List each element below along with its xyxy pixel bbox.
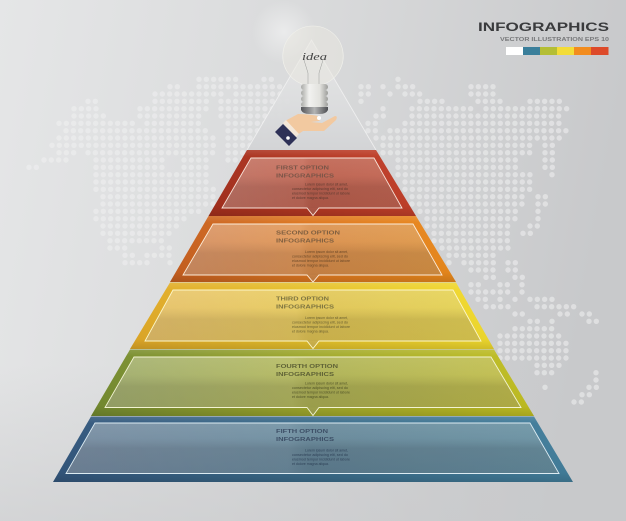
glass panel xyxy=(222,158,402,216)
subtitle: VECTOR ILLUSTRATION EPS 10 xyxy=(500,37,609,43)
text xyxy=(276,230,350,268)
icon: idea light bulb xyxy=(283,26,343,114)
bulb glass xyxy=(283,26,343,85)
text: SECOND OPTION xyxy=(276,230,340,236)
icon: hand holding bulb xyxy=(275,114,337,146)
text xyxy=(276,429,350,466)
text: consectetur adipiscing elit, sed do xyxy=(292,254,348,258)
text: Lorem ipsum dolor sit amet, xyxy=(305,382,348,386)
text: eiusmod tempor incididunt ut labore xyxy=(292,259,350,263)
text: et dolore magna aliqua. xyxy=(292,395,329,399)
dotted world map xyxy=(29,79,597,402)
text: consectetur adipiscing elit, sed do xyxy=(292,453,348,457)
filament xyxy=(304,60,323,85)
text: FIFTH OPTION xyxy=(276,429,328,435)
panel: third option xyxy=(130,282,494,349)
text: et dolore magna aliqua. xyxy=(292,196,329,200)
panel: second option xyxy=(170,216,456,282)
apex triangle xyxy=(247,40,376,150)
title: INFOGRAPHICS xyxy=(478,20,609,34)
text: eiusmod tempor incididunt ut labore xyxy=(292,192,350,196)
glass panel xyxy=(183,224,442,282)
text: et dolore magna aliqua. xyxy=(292,264,329,268)
text: consectetur adipiscing elit, sed do xyxy=(292,321,348,325)
glass panel xyxy=(66,423,559,474)
panel: fourth option xyxy=(91,350,534,416)
text: THIRD OPTION xyxy=(276,296,329,302)
text xyxy=(276,296,350,334)
text: et dolore magna aliqua. xyxy=(292,330,329,334)
text: Lorem ipsum dolor sit amet, xyxy=(305,182,348,186)
text: FIRST OPTION xyxy=(276,165,329,171)
panel: first option xyxy=(208,150,416,216)
colour legend xyxy=(506,47,608,55)
text: consectetur adipiscing elit, sed do xyxy=(292,386,348,390)
text: Lorem ipsum dolor sit amet, xyxy=(305,448,348,452)
text: INFOGRAPHICS xyxy=(276,437,334,443)
title block xyxy=(478,20,609,55)
text xyxy=(276,364,350,399)
text: Lorem ipsum dolor sit amet, xyxy=(305,316,348,320)
panel: fifth option xyxy=(53,416,573,482)
glass panel xyxy=(145,290,481,348)
text: FOURTH OPTION xyxy=(276,364,338,370)
word: idea: idea xyxy=(302,51,328,63)
text: INFOGRAPHICS xyxy=(276,304,334,310)
text xyxy=(276,165,350,200)
glass panel xyxy=(105,357,521,416)
text: et dolore magna aliqua. xyxy=(292,462,329,466)
text: eiusmod tempor incididunt ut labore xyxy=(292,391,350,395)
text: Lorem ipsum dolor sit amet, xyxy=(305,250,348,254)
text: consectetur adipiscing elit, sed do xyxy=(292,187,348,191)
text: eiusmod tempor incididunt ut labore xyxy=(292,325,350,329)
text: INFOGRAPHICS xyxy=(276,174,334,180)
text: INFOGRAPHICS xyxy=(276,372,334,378)
screw base xyxy=(301,84,328,114)
text: INFOGRAPHICS xyxy=(276,238,334,244)
text: eiusmod tempor incididunt ut labore xyxy=(292,458,350,462)
